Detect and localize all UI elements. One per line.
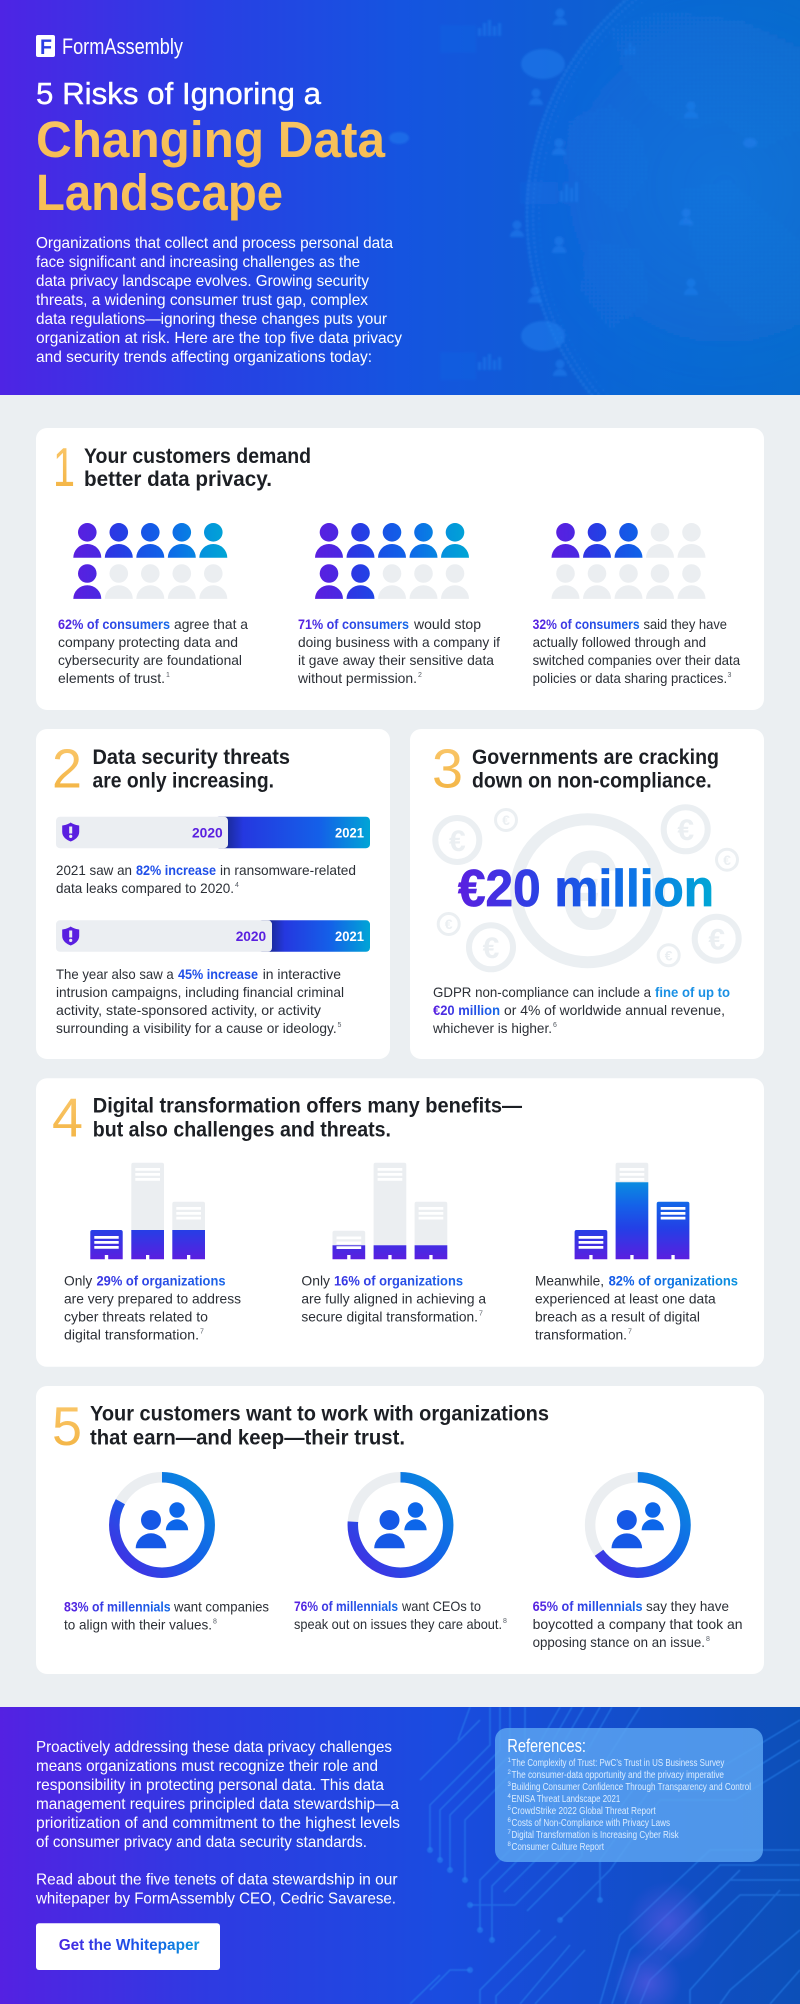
stat text: 82% increase: 4 [235, 882, 239, 889]
stat text: 29%: 7 [200, 1329, 204, 1336]
big stat: €20 million [458, 860, 714, 918]
euro coins backdrop: € [483, 932, 500, 965]
number 4: 4 [52, 1087, 83, 1149]
stat text: 45% increase: surrounding a visibility for a cause or ideology. [56, 1020, 337, 1036]
comparison bar 1: 2020 [192, 824, 223, 840]
stat text: 29%: are very prepared to address [64, 1291, 241, 1307]
stat text: 65%: boycotted a company that took an [533, 1616, 743, 1632]
stat text: 29% [64, 1273, 241, 1343]
references box: CrowdStrike 2022 Global Threat Report [512, 1806, 656, 1817]
stat text: 76%: speak out on issues they care about. [294, 1616, 502, 1632]
icon: two people [612, 1502, 664, 1548]
stat text: 45% increase: in interactive [263, 966, 341, 982]
stat text: 32% [533, 616, 740, 686]
stat text: 76% [294, 1598, 507, 1632]
euro coins backdrop: € [449, 825, 466, 858]
server chart: 82% [575, 1163, 689, 1259]
closing paragraph: means organizations must recognize their role and [36, 1758, 378, 1775]
title: 5 Risks of Ignoring a [36, 76, 322, 111]
euro coins backdrop: € [677, 814, 694, 847]
comparison bar 2 [56, 920, 370, 952]
stat text: 29%: 29% of organizations [96, 1273, 226, 1289]
stat text: 71% [297, 616, 500, 686]
intro paragraph: face significant and increasing challenges as the [36, 254, 360, 271]
stat text: 62%: elements of trust. [58, 670, 165, 686]
panel 1: customers demand privacy [36, 428, 764, 710]
server chart: 29% [90, 1163, 205, 1259]
whitepaper paragraph: whitepaper by FormAssembly CEO, Cedric Savarese. [35, 1890, 396, 1908]
stat text: 62%: cybersecurity are foundational [58, 652, 242, 668]
heading 5: Your customers want to work with organizations [90, 1402, 549, 1425]
stat text: 76%: want CEOs to [401, 1598, 481, 1614]
euro coins backdrop [435, 807, 739, 969]
number 3: 3 [432, 738, 463, 800]
stat text: 82%: experienced at least one data [535, 1291, 716, 1307]
stat text: 76%: 8 [503, 1618, 507, 1625]
stat text: 71%: 2 [418, 672, 422, 679]
heading 1: better data privacy. [84, 468, 272, 491]
donut chart: 65% [590, 1477, 686, 1573]
stat text: 65%: 8 [706, 1636, 710, 1643]
heading 2: are only increasing. [92, 770, 274, 792]
whitepaper paragraph [35, 1872, 398, 1908]
icon: shield [62, 822, 79, 842]
closing paragraph [36, 1739, 400, 1851]
stat text: 62%: company protecting data and [58, 634, 238, 650]
references box: 1 [508, 1758, 512, 1764]
number 1: 1 [53, 436, 75, 498]
number 5: 5 [52, 1395, 82, 1457]
stat text: 29%: cyber threats related to [64, 1309, 208, 1325]
logo: F [40, 36, 52, 59]
number 2: 2 [52, 738, 82, 800]
stat text: 16% [301, 1273, 486, 1325]
stat text: 82%: breach as a result of digital [535, 1309, 700, 1325]
closing paragraph: of consumer privacy and data security standards. [36, 1834, 367, 1851]
panel 4: digital transformation [36, 1078, 764, 1367]
references box: The consumer-data opportunity and the privacy imperative [512, 1770, 724, 1781]
stat text: 82%: 7 [628, 1329, 632, 1336]
references box: 7 [508, 1830, 512, 1836]
stat text: 45% increase: The year also saw a [56, 966, 174, 982]
header banner [0, 0, 800, 395]
heading 4 [93, 1095, 522, 1142]
comparison bar 1: 2021 [335, 824, 364, 840]
heading 1: Your customers demand [84, 445, 311, 468]
heading 2 [92, 746, 290, 792]
references box: The Complexity of Trust: PwC’s Trust in US Business Survey [512, 1758, 724, 1769]
euro coins backdrop: € [557, 828, 619, 953]
closing paragraph: prioritization of and commitment to the highest levels [36, 1815, 400, 1832]
stat text: 82% increase: data leaks compared to 2020. [56, 880, 234, 896]
euro coins backdrop: € [445, 916, 453, 932]
intro paragraph: and security trends affecting organizations today: [36, 349, 372, 366]
closing paragraph: Proactively addressing these data privacy challenges [36, 1739, 392, 1756]
heading 2: Data security threats [92, 746, 290, 769]
stat text: 62%: 1 [166, 672, 170, 679]
intro paragraph: threats, a widening consumer trust gap, complex [36, 292, 368, 309]
stat text: GDPR fine: 6 [553, 1022, 557, 1029]
panel 3: governments [410, 729, 764, 1059]
header globe decoration [389, 0, 800, 395]
stat text: 83%: 83% of millennials [64, 1599, 171, 1615]
stat text: 71%: without permission. [297, 670, 417, 686]
panel 2: security threats [36, 729, 390, 1059]
references box: Costs of Non-Compliance with Privacy Laws [512, 1818, 670, 1829]
intro paragraph: organization at risk. Here are the top five data privacy [36, 330, 402, 347]
references box: 5 [508, 1806, 512, 1812]
stat text: 16%: secure digital transformation. [301, 1309, 478, 1325]
heading 4: Digital transformation offers many benefits— [93, 1095, 522, 1118]
heading 3 [472, 746, 719, 792]
references box: 3 [508, 1782, 512, 1788]
euro coins backdrop: € [502, 812, 510, 828]
people grid: 71% [315, 523, 469, 599]
stat text: 83%: to align with their values. [64, 1617, 212, 1633]
stat text: GDPR fine [432, 984, 730, 1036]
button [36, 1923, 220, 1970]
icon: two people [374, 1502, 427, 1548]
heading 3: Governments are cracking [472, 746, 719, 769]
stat text: 71%: it gave away their sensitive data [298, 652, 494, 668]
stat text: 82% [535, 1273, 738, 1343]
whitepaper paragraph: Read about the five tenets of data stewardship in our [36, 1872, 398, 1888]
button: Get the Whitepaper [59, 1937, 200, 1954]
stat text: 32%: policies or data sharing practices. [533, 670, 727, 686]
stat text: 32%: 32% of consumers [533, 616, 640, 632]
euro coins backdrop: € [708, 924, 725, 956]
stat text: 29%: digital transformation. [64, 1327, 199, 1343]
stat text: GDPR fine: or 4% of worldwide annual revenue, [504, 1002, 725, 1018]
stat text: 83% [64, 1599, 269, 1633]
stat text: 82%: transformation. [535, 1327, 627, 1343]
stat text: 16%: 7 [479, 1311, 483, 1318]
heading 4: but also challenges and threats. [93, 1119, 391, 1142]
stat text: 29%: Only [64, 1273, 92, 1289]
stat text: 16%: Only [301, 1273, 330, 1289]
stat text: 45% increase: intrusion campaigns, including financial criminal [56, 984, 344, 1000]
stat text: 71%: 71% of consumers [298, 616, 409, 632]
stat text: 16%: 16% of organizations [334, 1273, 463, 1289]
donut chart: 83% [114, 1477, 210, 1573]
references box: Building Consumer Confidence Through Transparency and Control [512, 1782, 751, 1793]
stat text: 45% increase [56, 966, 344, 1036]
heading 5: that earn—and keep—their trust. [90, 1426, 405, 1449]
stat text: 82% increase: in ransomware-related [220, 862, 356, 878]
euro coins backdrop: € [723, 852, 731, 868]
logo: FormAssembly [62, 34, 183, 59]
intro paragraph: Organizations that collect and process personal data [36, 235, 393, 252]
comparison bar 1 [56, 817, 370, 848]
references box: 4 [508, 1794, 512, 1800]
stat text: GDPR fine: whichever is higher. [432, 1020, 552, 1036]
references box: 8 [508, 1842, 512, 1848]
references box: ENISA Threat Landscape 2021 [512, 1794, 621, 1805]
stat text: 83%: 8 [213, 1619, 217, 1626]
stat text: GDPR fine: GDPR non-compliance can include a [433, 984, 651, 1000]
references box: Consumer Culture Report [512, 1842, 604, 1853]
stat text: 62%: 62% of consumers [58, 616, 170, 632]
closing paragraph: responsibility in protecting personal data. This data [36, 1777, 384, 1794]
euro coins backdrop: € [665, 948, 673, 964]
stat text: 65%: 65% of millennials [533, 1598, 643, 1614]
heading 1 [84, 445, 311, 491]
stat text: 82% increase: 2021 saw an [56, 862, 132, 878]
references box [495, 1728, 763, 1862]
stat text: 32%: said they have [644, 616, 727, 632]
donut chart: 76% [353, 1477, 448, 1573]
stat text: 65% [533, 1598, 743, 1650]
intro paragraph [36, 235, 402, 366]
panel 5: customers want trust [36, 1386, 764, 1674]
stat text: 71%: would stop [413, 616, 481, 632]
stat text: 83%: want companies [173, 1599, 269, 1615]
heading 5 [90, 1402, 549, 1449]
server chart: 16% [332, 1163, 447, 1259]
title: Changing Data [36, 111, 386, 168]
stat text: 32%: 3 [728, 672, 732, 679]
stat text: 62%: agree that a [174, 616, 248, 632]
icon: two people [136, 1502, 188, 1548]
stat text: GDPR fine: €20 million [433, 1002, 500, 1018]
stat text: 65%: say they have [646, 1598, 729, 1614]
stat text: 45% increase: 45% increase [178, 966, 258, 982]
comparison bar 2: 2021 [335, 928, 364, 944]
stat text: 32%: actually followed through and [533, 634, 706, 650]
intro paragraph: data regulations—ignoring these changes puts your [36, 311, 388, 328]
comparison bar 2: 2020 [236, 928, 266, 944]
stat text: 82% increase [56, 862, 356, 896]
intro paragraph: data privacy landscape evolves. Growing security [36, 273, 369, 290]
closing paragraph: management requires principled data stewardship—a [36, 1796, 399, 1813]
footer circuit decoration [410, 1707, 800, 2004]
stat text: GDPR fine: fine of up to [655, 984, 730, 1000]
stat text: 65%: opposing stance on an issue. [533, 1634, 705, 1650]
stat text: 45% increase: 5 [338, 1022, 342, 1029]
stat text: 32%: switched companies over their data [533, 652, 740, 668]
stat text: 45% increase: activity, state-sponsored activity, or activity [56, 1002, 321, 1018]
stat text: 82%: Meanwhile, [535, 1273, 604, 1289]
title [36, 76, 386, 221]
stat text: 76%: 76% of millennials [294, 1598, 398, 1614]
references box: References: [507, 1736, 586, 1756]
stat text: 82% increase: 82% increase [136, 862, 216, 878]
heading 3: down on non-compliance. [472, 770, 712, 792]
people grid: 62% [73, 523, 227, 599]
stat text: 16%: are fully aligned in achieving a [301, 1291, 486, 1307]
icon: shield [62, 926, 79, 946]
stat text: 62% [58, 616, 248, 686]
references box: 6 [508, 1818, 512, 1824]
people grid: 32% [552, 523, 706, 599]
references box: 2 [508, 1770, 512, 1776]
footer banner [0, 1707, 800, 2004]
title: Landscape [36, 164, 283, 221]
stat text: 71%: doing business with a company if [298, 634, 500, 650]
references box: Digital Transformation is Increasing Cyber Risk [512, 1830, 679, 1841]
stat text: 82%: 82% of organizations [609, 1273, 738, 1289]
